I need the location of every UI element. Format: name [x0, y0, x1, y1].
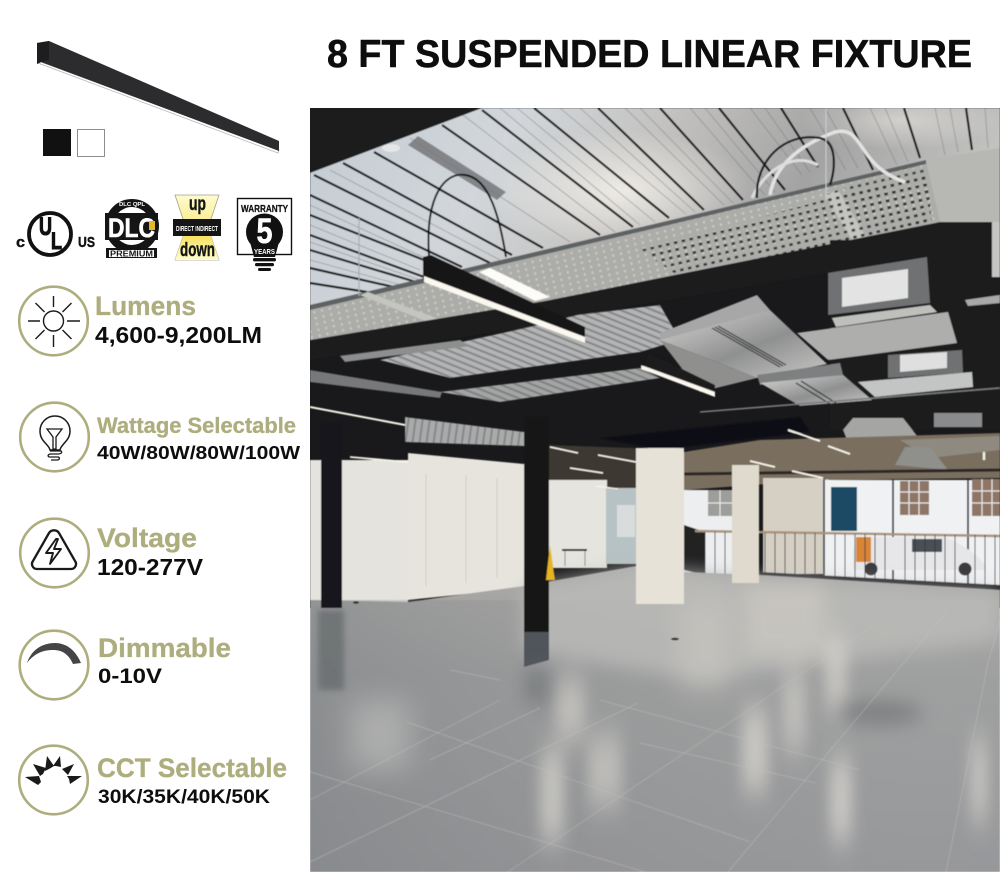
CCT value: 30K/35K/40K/50K: [98, 787, 270, 808]
voltage label: Voltage: [97, 523, 197, 553]
certification: cUL US: L: [51, 228, 62, 255]
small table and chairs: [562, 549, 587, 566]
certification: 5 year warranty: [238, 198, 292, 271]
CCT label: CCT Selectable: [97, 753, 287, 783]
icon: dimmer arc: [20, 631, 88, 699]
certification: 5 year warranty: WARRANTY: [241, 204, 288, 215]
certification: DLC premium: PREMIUM: [110, 250, 153, 258]
certification: up / direct indirect / down: up: [189, 194, 206, 215]
icon: triangular lightning warning: [20, 519, 89, 587]
feature: CCT selectable: [19, 746, 287, 814]
floor drains: [353, 601, 679, 640]
floor: [310, 566, 1000, 872]
mid-ground ceiling: [548, 444, 637, 489]
air ducts and service boxes: [660, 222, 1000, 440]
feature: dimmable: [20, 631, 231, 699]
yellow wet floor sign: [546, 545, 555, 580]
wattage label: Wattage Selectable: [97, 413, 296, 438]
dimmable value: 0-10V: [98, 665, 162, 688]
floor tile joints: [310, 656, 990, 872]
ceiling deck: [310, 90, 1000, 345]
colour swatches: black and white: [43, 129, 104, 156]
feature: lumens: [19, 287, 262, 355]
windows, door, van and railing: [684, 479, 1000, 591]
certification: cUL US: c: [16, 234, 25, 251]
icon: sun: [19, 287, 88, 355]
certification: cUL US: U: [39, 213, 52, 241]
hanging wires: [359, 108, 905, 296]
certification: DLC premium: DLC QPL: [119, 202, 146, 208]
suspended fixtures in the distance: [310, 407, 984, 489]
voltage value: 120-277V: [97, 554, 204, 580]
certification: cUL US: US: [78, 234, 95, 251]
floor reflections: [318, 585, 988, 840]
main suspended fixture: [423, 255, 585, 343]
certification: up / direct indirect / down: [173, 194, 221, 261]
certification: up / direct indirect / down: DIRECT INDIRECT: [176, 226, 218, 233]
wattage value: 40W/80W/80W/100W: [97, 443, 300, 463]
photo: office interior with suspended linear fixtures: [310, 90, 1000, 872]
certification: 5 year warranty: YEARS: [254, 247, 275, 256]
certification: DLC premium: [105, 199, 159, 258]
feature: voltage: [20, 519, 204, 587]
second suspended fixture: [640, 364, 716, 398]
concrete soffit far right: [600, 417, 1000, 490]
black beam and upper structure: [310, 222, 1000, 430]
certification: up / direct indirect / down: down: [180, 240, 215, 261]
icon: half sun with spikes: [19, 746, 88, 814]
dimmable label: Dimmable: [98, 633, 231, 663]
lumens label: Lumens: [95, 291, 196, 321]
product image: suspended linear fixture: [37, 41, 279, 153]
certification: cUL US: [16, 213, 95, 255]
certification: DLC premium: DLC: [108, 213, 155, 243]
columns: [321, 417, 759, 632]
back walls: [310, 453, 1000, 602]
icon: light bulb: [20, 403, 89, 471]
lumens value: 4,600-9,200LM: [95, 322, 262, 348]
cable tray: [310, 148, 1000, 340]
title: 8 FT SUSPENDED LINEAR FIXTURE: [327, 33, 972, 76]
spiral duct, upper left: [405, 417, 524, 446]
certification: 5 year warranty: 5: [256, 212, 272, 251]
feature: wattage selectable: [20, 403, 300, 471]
